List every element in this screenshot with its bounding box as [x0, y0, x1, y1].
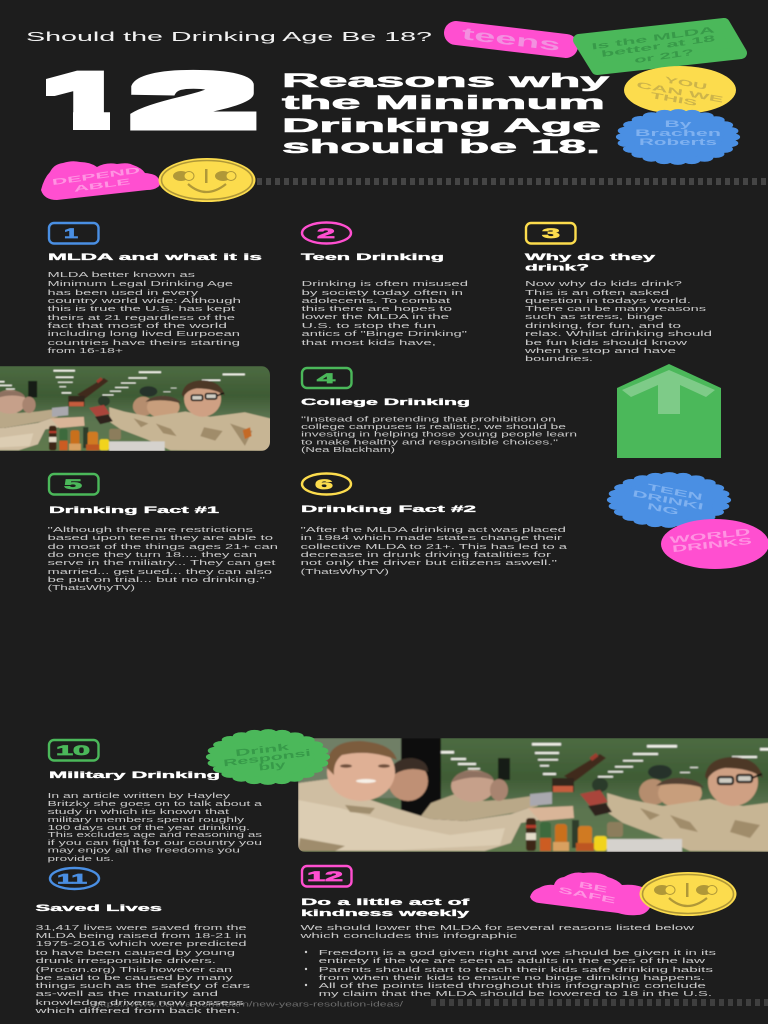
sticker: drink responsibly: Responsi: [223, 748, 311, 769]
sticker: by Brachen Roberts: Roberts: [639, 137, 717, 147]
section 4: [301, 368, 577, 454]
divider bottom: [431, 999, 768, 1006]
heading 4: College Drinking: [301, 397, 470, 407]
badge 6: [302, 474, 351, 494]
body 11: as-well as the maturity and: [36, 991, 218, 998]
sticker: you can we this: THIS: [650, 90, 699, 108]
body 12: which concludes this infographic: [298, 933, 518, 940]
sticker: by Brachen Roberts: By: [664, 119, 692, 129]
body 11: which differed from back then.: [33, 1008, 240, 1015]
badge 12: 12: [307, 868, 343, 884]
body 4: (Nea Blackham): [301, 447, 395, 454]
sticker: is the MLDA better: Is the MLDA: [591, 24, 717, 52]
heading 12: Do a little act of: [301, 897, 471, 907]
body 5: [48, 527, 278, 592]
badge 11: 11: [57, 870, 87, 886]
badge 5: [49, 474, 98, 494]
heading 12: [301, 897, 471, 918]
icon: green up arrow: [617, 364, 721, 458]
sticker: teen drinking: TEEN: [647, 482, 703, 502]
body 3: question in todays world.: [525, 298, 691, 305]
body 2: adolecents. To combat: [302, 298, 450, 305]
sticker: drink responsibly: Drink: [235, 742, 291, 759]
body 10: provide us.: [48, 856, 114, 863]
body 1: Minimum Legal Drinking Age: [48, 281, 233, 288]
body 2: U.S. to stop the fun: [302, 323, 436, 330]
body 5: (ThatsWhyTV): [48, 585, 135, 592]
body 5: serve in the miliatry... They can get: [48, 560, 276, 567]
big number 12: 2: [127, 62, 261, 141]
body 11: [33, 925, 251, 1015]
divider top: [257, 178, 768, 185]
sticker: teens: teens: [461, 24, 561, 55]
heading 1: MLDA and what it is: [48, 252, 262, 262]
body 12: my claim that the MLDA should be lowered to 18 in the U.S.: [319, 991, 712, 998]
sticker: be safe cloud: [530, 872, 652, 915]
sticker: teen drinking: [616, 476, 722, 524]
body 4: college campuses is realistic, we should be: [301, 424, 566, 431]
badge 12: [302, 866, 352, 886]
body 11: (Procon.org) This however can: [36, 967, 232, 974]
body 4: investing in helping those young people learn: [301, 432, 577, 439]
section 2: [301, 222, 468, 347]
icon: smiley bottom: [640, 872, 736, 916]
badge 1: 1: [64, 225, 78, 241]
body 3: when to stop and have: [523, 348, 676, 355]
body 2: by society today often in: [302, 290, 463, 297]
body 12: We should lower the MLDA for several reasons listed below: [300, 925, 696, 932]
badge 1: [49, 223, 98, 244]
body 11: drunk irresponsible drivers.: [36, 958, 216, 965]
title: Reasons why: [282, 70, 609, 92]
big number 12: [46, 70, 256, 130]
sticker: drink responsibly: bly: [258, 759, 288, 774]
body 4: to make healthy and responsible choices.": [301, 439, 559, 446]
badge 10: [49, 740, 98, 760]
header question: Should the Drinking Age Be 18?: [26, 30, 432, 44]
body 3: Now why do kids drink?: [525, 281, 682, 288]
body 5: "Although there are restrictions: [48, 527, 254, 534]
body 3: [523, 281, 712, 363]
sticker: drink responsibly: [215, 733, 321, 781]
body 6: "After the MLDA drinking act was placed: [300, 527, 566, 534]
body 12: Parents should start to teach their kids safe drinking habits: [319, 967, 714, 974]
body 10: This excludes age and reasoning as: [48, 832, 263, 839]
body 1: including long lived Eurpoean: [48, 331, 240, 338]
body 10: military members spend roughly: [48, 817, 245, 824]
sticker: dependable cloud: DEPEND: [51, 165, 141, 187]
body 1: fact that most of the world: [48, 323, 227, 330]
title: should be 18.: [282, 136, 600, 158]
heading 12: kindness weekly: [301, 908, 471, 918]
body 11: things such as the safety of cars: [36, 983, 251, 990]
sticker: teen drinking: DRINKI: [632, 488, 704, 512]
heading 10: Military Drinking: [49, 770, 220, 780]
title: [282, 70, 609, 158]
badge 4: 4: [317, 370, 335, 386]
body 5: do most of the things ages 21+ can: [48, 544, 278, 551]
body 10: [48, 793, 263, 863]
body 6: (ThatsWhyTV): [300, 569, 389, 576]
body 10: may enjoy all the freedoms you: [48, 848, 240, 854]
body 6: in 1984 which made states change their: [300, 535, 563, 542]
badge 3: [526, 223, 576, 244]
body 10: if you can fight for our country you: [48, 840, 262, 847]
body 3: such as stress, binge: [525, 314, 663, 321]
body 11: to have been caused by young: [36, 950, 235, 957]
heading 6: Drinking Fact #2: [301, 504, 476, 514]
title: Drinking Age: [282, 115, 601, 137]
heading 3: [525, 252, 657, 273]
body 2: [302, 281, 468, 347]
title: the Minimum: [282, 92, 605, 114]
sticker: you can we this: CAN WE: [636, 79, 725, 105]
body 10: Britzky she goes on to talk about a: [48, 801, 262, 808]
body 11: MLDA being raised from 18-21 in: [36, 933, 247, 940]
icon: smiley: [158, 158, 256, 202]
body 12: entirety if the we are seen as adults in the eyes of the law: [319, 958, 707, 965]
body 12: Freedom is a god given right and we should be given it in its: [319, 950, 717, 957]
badge 3: 3: [542, 225, 560, 241]
sticker: world drinks: WORLD: [669, 527, 751, 546]
body 1: this is true the U.S. has kept: [48, 306, 235, 313]
heading 3: Why do they: [525, 252, 657, 262]
section 11: [33, 868, 251, 1015]
sticker: is the MLDA better: or 21?: [634, 47, 694, 65]
body 11: 1975-2016 which were predicted: [36, 941, 247, 948]
badge 11: [50, 868, 99, 889]
body 1: from 16-18+: [48, 348, 123, 355]
heading 3: drink?: [525, 263, 590, 273]
big number 12: 1: [37, 62, 132, 141]
section 6: [300, 474, 567, 576]
body 2: that most kids have,: [302, 340, 436, 347]
body 11: be said to be caused by many: [36, 975, 234, 982]
body 6: collective MLDA to 21+. This has led to a: [300, 544, 567, 551]
body 1: [48, 272, 241, 355]
body 1: MLDA better known as: [48, 272, 196, 279]
body 6: [300, 527, 567, 576]
body 3: This is an often asked: [525, 290, 669, 297]
body 6: not only the driver but citizens aswell.": [300, 560, 558, 567]
body 4: [301, 416, 577, 454]
sticker: dependable cloud: [41, 161, 160, 200]
badge 5: 5: [64, 476, 82, 492]
photo: soldiers small: [0, 366, 284, 451]
heading 11: Saved Lives: [36, 903, 162, 913]
sticker: by Brachen Roberts: Brachen: [635, 128, 721, 138]
section 10: [48, 740, 263, 863]
badge 2: 2: [317, 225, 335, 241]
sticker: you can we this: [624, 66, 736, 114]
sticker: world drinks: DRINKS: [672, 536, 752, 555]
body 12: [298, 925, 717, 998]
section 3: [523, 223, 712, 363]
badge 6: 6: [315, 476, 333, 492]
body 11: 31,417 lives were saved from the: [36, 925, 247, 932]
sticker: is the MLDA better: [579, 24, 741, 69]
sticker: dependable cloud: ABLE: [73, 176, 132, 194]
body 1: has been used in every: [48, 290, 199, 297]
section 1: [48, 223, 262, 355]
body 3: boundries.: [525, 356, 593, 363]
sticker: world drinks: [661, 519, 768, 569]
body 6: decrease in drunk driving fatalities for: [300, 552, 552, 559]
sticker: is the MLDA better: better at 18: [600, 33, 716, 59]
photo: soldiers large: [298, 738, 768, 852]
sticker: be safe cloud: BE: [578, 879, 609, 895]
body 3: There can be many reasons: [525, 306, 707, 313]
body 1: country world wide: Although: [48, 298, 241, 305]
body 2: Drinking is often misused: [302, 281, 468, 288]
body 2: antics of "Binge Drinking": [302, 331, 468, 338]
badge 2: [302, 222, 351, 244]
body 5: do once they turn 18.... they can: [48, 552, 257, 559]
body 4: "Instead of pretending that prohibition on: [301, 416, 556, 423]
sticker: teens: [456, 24, 566, 55]
section 12: [298, 866, 717, 998]
body 5: be put on trial... but no drinking.": [48, 577, 266, 584]
body 3: drinking, for fun, and to: [525, 323, 681, 330]
badge 4: [302, 368, 352, 388]
body 12: All of the points listed throghout this infographic conclude: [319, 983, 706, 990]
body 5: based upon teens they are able to: [48, 535, 273, 542]
body 2: this there are hopes to: [302, 306, 452, 313]
sticker: you can we this: YOU: [664, 74, 708, 92]
body 10: In an article written by Hayley: [48, 793, 231, 800]
source url: https://www.canva.com/learn/new-years-resolution-ideas/: [93, 1002, 403, 1008]
body 3: relax. Whilst drinking should: [525, 331, 712, 338]
body 10: study in which its known that: [48, 809, 229, 816]
sticker: teen drinking: NG: [646, 501, 680, 517]
badge 10: 10: [56, 742, 90, 758]
body 2: lower the MLDA in the: [302, 314, 449, 321]
heading 2: Teen Drinking: [301, 252, 444, 262]
body 3: be fun kids should know: [525, 340, 689, 347]
body 10: 100 days out of the year drinking.: [48, 825, 250, 832]
section 5: [48, 474, 278, 592]
heading 5: Drinking Fact #1: [49, 505, 219, 515]
sticker: be safe cloud: SAFE: [558, 885, 617, 906]
body 12: from when their kids to ensure no binge dirnking happens.: [319, 975, 705, 982]
sticker: by Brachen Roberts: [625, 113, 731, 161]
body 1: theirs at 21 regardless of the: [48, 315, 235, 322]
body 1: countries have theirs starting: [48, 340, 240, 347]
body 5: married... get sued... they can also: [48, 569, 272, 576]
body 11: knowledge drivers now possess: [36, 1000, 245, 1007]
